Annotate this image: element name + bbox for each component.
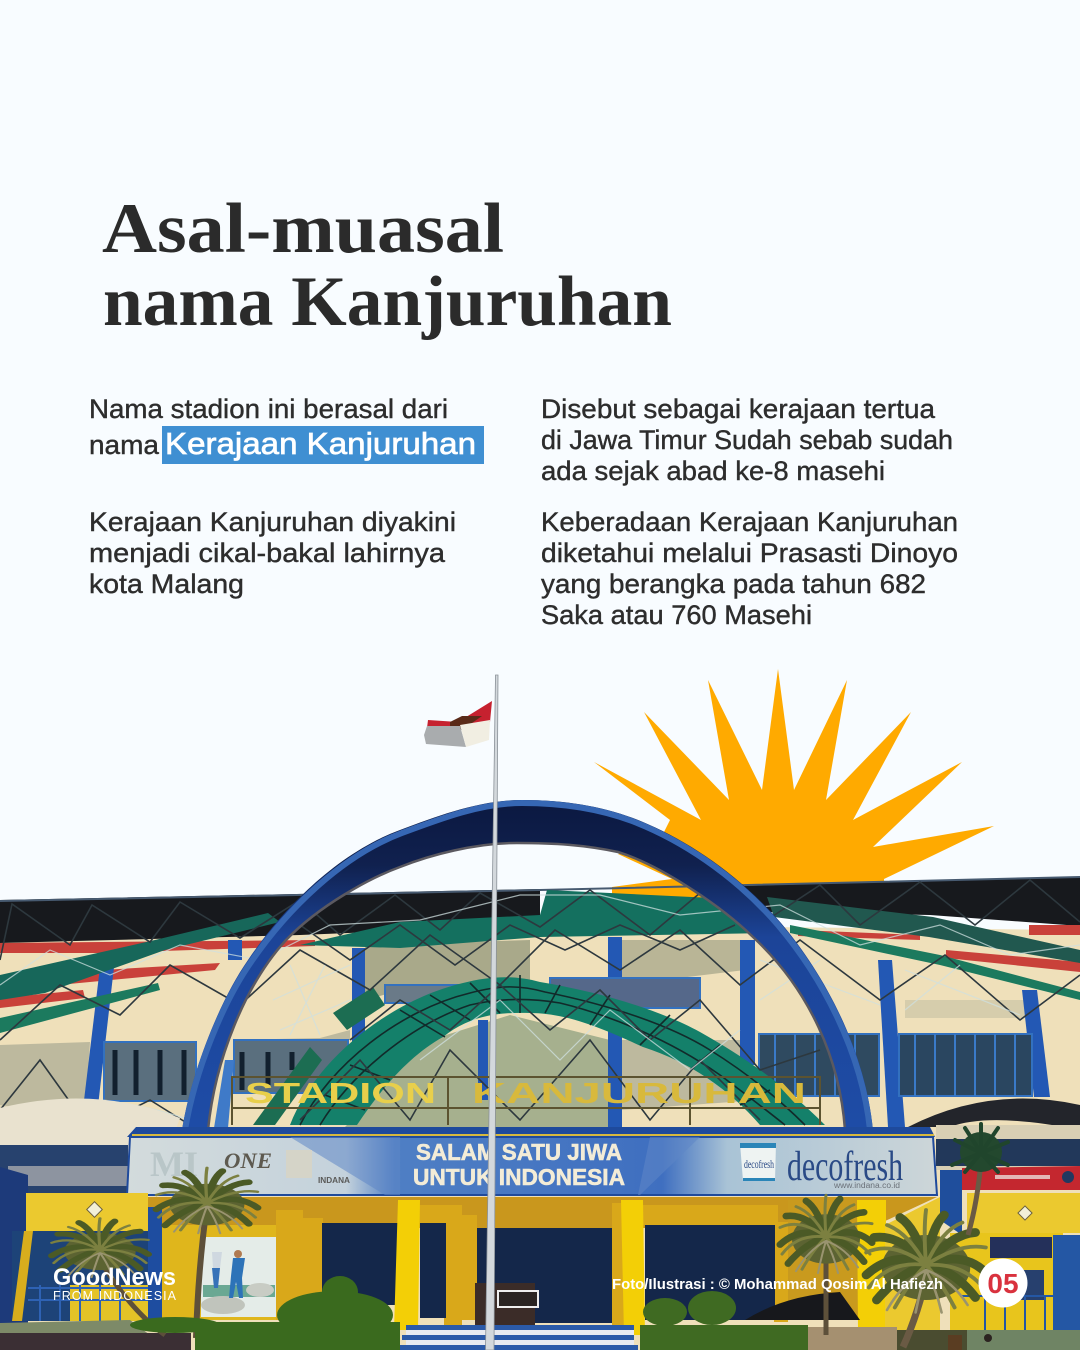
left teal canopy [0,913,280,1000]
text block: oldest kingdom: ada sejak abad ke-8 masehi [541,456,885,486]
plaque [475,1283,538,1325]
wooden bench [807,1327,897,1350]
red banner [962,1166,1080,1190]
stadium sign [232,1077,820,1125]
shrubs centre left [130,1276,400,1350]
right yellow wing [885,1170,1080,1330]
roof rim [0,877,1080,901]
lower blue pier [214,1060,234,1128]
icon: paint bucket [740,1143,776,1181]
icon: orange sunburst [594,669,994,900]
logo: GoodNews From Indonesia [53,1264,177,1303]
text block: oldest kingdom [541,394,953,486]
shrubs centre right [640,1291,808,1350]
text block: Dinoyo inscription: diketahui melalui Prasasti Dinoyo [541,538,958,568]
text block: stadium name origin: nama [89,430,160,460]
bottom right ground [967,1330,1080,1350]
left yellow wall [26,1193,148,1231]
diamond ornament left [87,1202,102,1217]
diamond ornament right [1018,1206,1032,1220]
banner slogan: UNTUK INDONESIA [413,1164,625,1190]
banner left logo: ONE [224,1148,272,1173]
tall palm tree [952,1124,1008,1235]
building wall [0,925,1080,1350]
title [102,190,672,341]
banner left logo: MI [150,1144,198,1184]
logo: GoodNews From Indonesia: GoodNews [53,1264,176,1291]
mural of footballers [201,1237,277,1317]
banner url: www.indana.co.id [833,1181,900,1190]
text block: oldest kingdom: di Jawa Timur Sudah sebab sudah [541,425,953,455]
flag [424,701,492,747]
blue columns [76,937,1050,1167]
soffit [148,1197,937,1228]
wall shadow areas [0,940,1025,1166]
right windows [936,1139,1080,1166]
text block: forerunner of Malang: kota Malang [89,569,244,599]
banner slogan: SALAM SATU JIWA [416,1139,622,1165]
stadium sign: STADION [245,1078,436,1110]
left lower bay [12,1231,148,1321]
palm tree centre right [780,1195,872,1335]
palm tree right [866,1210,986,1347]
left blue wall block [0,1167,28,1325]
yellow pillars [276,1200,860,1330]
bottom left planter [0,1333,191,1350]
dome lattice [300,975,805,1125]
illustration: stadium building [0,800,1080,1350]
left upper rail [0,1145,128,1193]
text block: Dinoyo inscription [541,507,958,630]
banner slogan [413,1139,625,1190]
palm tree far left [52,1218,165,1335]
highlight: Kerajaan Kanjuruhan: Kerajaan Kanjuruhan [165,426,476,461]
text block: forerunner of Malang: Kerajaan Kanjuruhan diyakini [89,507,456,537]
window mullions [115,1050,292,1095]
page number: 05 [987,1268,1019,1299]
text block: Dinoyo inscription: yang berangka pada tahun 682 [541,569,926,599]
left balcony [8,1166,128,1186]
right upper wall [936,1125,1080,1170]
yellow wall with mural [162,1225,278,1320]
palm tree left [156,1168,258,1338]
left dome strip [253,1047,322,1125]
small green awning [333,987,385,1030]
green dome canopy [290,977,825,1125]
flagpole [486,675,498,1350]
bright yellow pillars [394,1200,886,1335]
bottom left ground [0,1320,150,1335]
text block: Dinoyo inscription: Keberadaan Kerajaan Kanjuruhan [541,507,958,537]
text block: oldest kingdom: Disebut sebagai kerajaan tertua [541,394,936,424]
blue fascia [127,1127,935,1137]
text block: forerunner of Malang: menjadi cikal-bakal lahirnya [89,538,446,568]
blue column [148,1207,162,1320]
stadium sign: KANJURUHAN [472,1078,806,1110]
banner left logo: INDANA [318,1176,350,1185]
upper teal canopy [300,890,772,948]
black car [745,1292,860,1320]
banner left logo [150,1144,350,1185]
halftone [290,1137,700,1195]
gold trim [132,1134,934,1136]
banner [127,1137,937,1195]
text block: forerunner of Malang [89,507,456,599]
doors [322,1223,775,1323]
lit truss members [0,895,1080,1165]
arch [182,800,873,1130]
right black awning [908,1099,1080,1130]
logo: GoodNews From Indonesia: FROM INDONESIA [53,1289,177,1303]
people on the bench [948,1334,992,1350]
black roof [0,877,1080,943]
truss lattice [0,880,1080,1130]
title: Asal-muasal [102,190,504,268]
left white canopy [0,1099,180,1145]
text block: Dinoyo inscription: Saka atau 760 Masehi [541,600,812,630]
right teal canopy [767,897,1080,963]
text block: stadium name origin: Nama stadion ini berasal dari [89,394,448,424]
right ground shade [897,1330,967,1350]
page number [978,1258,1028,1308]
banner brand: decofresh [787,1144,903,1190]
entrance steps [398,1325,638,1350]
title: nama Kanjuruhan [103,263,672,341]
photo credit: Foto/Ilustrasi : © Mohammad Qosim Al Hafiezh [612,1276,943,1293]
windows [104,978,1032,1101]
red stripes [0,925,1080,1008]
text block: stadium name origin [89,394,484,464]
icon: paint bucket: decofresh [744,1157,774,1171]
